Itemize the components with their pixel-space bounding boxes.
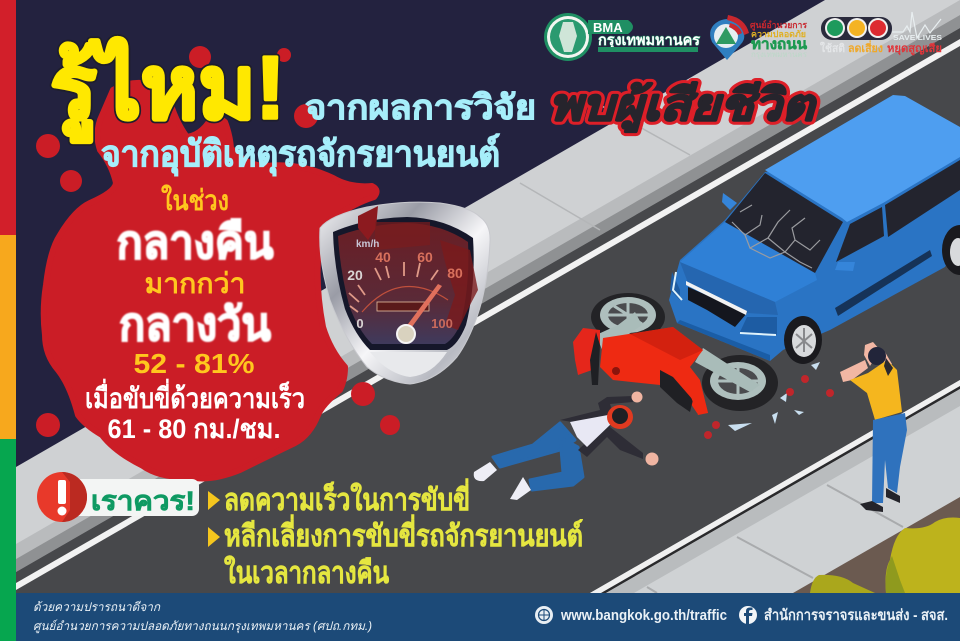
footer: credit text: ด้วยความปรารถนาดีจาก <box>33 600 161 614</box>
logo: BMA <box>544 13 701 61</box>
logo: road safety pin: ทางถนน <box>751 36 808 53</box>
logo: BMA: BMA <box>593 20 623 35</box>
logos <box>544 12 942 61</box>
heading: found fatalities: พบผู้เสียชีวิต <box>549 81 817 133</box>
logo: road safety pin: ศูนย์อำนวยการ <box>750 19 807 31</box>
callout: we should: เราควร! <box>91 486 195 516</box>
motorcycle <box>573 293 778 415</box>
speedometer: 40 <box>375 249 391 265</box>
bullet list: recommendations: ลดความเร็วในการขับขี่ <box>224 478 470 517</box>
text block: statistics: ในช่วง <box>161 184 229 216</box>
footer: credit text: ศูนย์อำนวยการความปลอดภัยทางถนนกรุงเทพมหานคร (ศปถ.กทม.) <box>33 619 372 634</box>
text block: statistics: กลางวัน <box>119 298 272 350</box>
speedometer: 20 <box>347 267 363 283</box>
debris <box>704 362 834 439</box>
bushes <box>810 518 960 593</box>
speedometer <box>320 202 490 384</box>
bullet list: recommendations: ในเวลากลางคืน <box>224 555 389 590</box>
speedometer: 100 <box>431 316 453 331</box>
speedometer: 80 <box>447 265 463 281</box>
bullet list: recommendations <box>208 478 583 590</box>
text block: statistics: เมื่อขับขี่ด้วยความเร็ว <box>85 378 305 414</box>
text block: statistics: มากกว่า <box>144 268 246 299</box>
text block: statistics: 61 - 80 กม./ชม. <box>108 414 280 444</box>
car <box>669 95 960 364</box>
heading: from research: จากผลการวิจัย <box>305 89 536 127</box>
title: รู้ไหม!: รู้ไหม! <box>50 38 285 143</box>
logo: save lives <box>820 12 942 56</box>
icon: facebook <box>739 606 757 624</box>
title: รู้ไหม!: รู้ไหม! <box>50 38 285 143</box>
text block: statistics: 52 - 81% <box>134 348 255 379</box>
logo: road safety pin: ความปลอดภัย <box>751 29 806 39</box>
logo: road safety pin <box>710 15 808 60</box>
speedometer: 0 <box>356 316 364 331</box>
logo: BMA: กรุงเทพมหานคร <box>598 32 701 50</box>
callout: we should <box>37 472 199 522</box>
bystander <box>840 342 907 512</box>
logo: save lives: หยุดสูญเสีย <box>887 42 942 56</box>
logo: save lives: SAVE LIVES <box>893 35 942 42</box>
logo: road safety pin: กรุงเทพมหานคร <box>751 50 808 59</box>
speedometer: 60 <box>417 249 433 265</box>
text block: statistics: กลางคืน <box>116 216 274 268</box>
footer bar <box>16 593 960 641</box>
heading: motorcycle accidents: จากอุบัติเหตุรถจักรยานยนต์ <box>101 133 500 177</box>
footer: credit text <box>33 600 372 634</box>
speedometer: km/h <box>356 239 379 250</box>
logo: save lives: ลดเสี่ยง <box>848 40 883 55</box>
heading: found fatalities: พบผู้เสียชีวิต <box>549 81 817 133</box>
logo: save lives: ใช้สติ <box>820 41 845 55</box>
blood splatter <box>36 46 400 478</box>
fallen rider <box>474 392 658 500</box>
text block: statistics <box>85 184 305 444</box>
website: www.bangkok.go.th/traffic <box>560 607 727 624</box>
bullet list: recommendations: หลีกเลี่ยงการขับขี่รถจักรยานยนต์ <box>224 514 583 553</box>
left colour stripe <box>0 0 16 641</box>
icon: globe <box>535 606 553 624</box>
